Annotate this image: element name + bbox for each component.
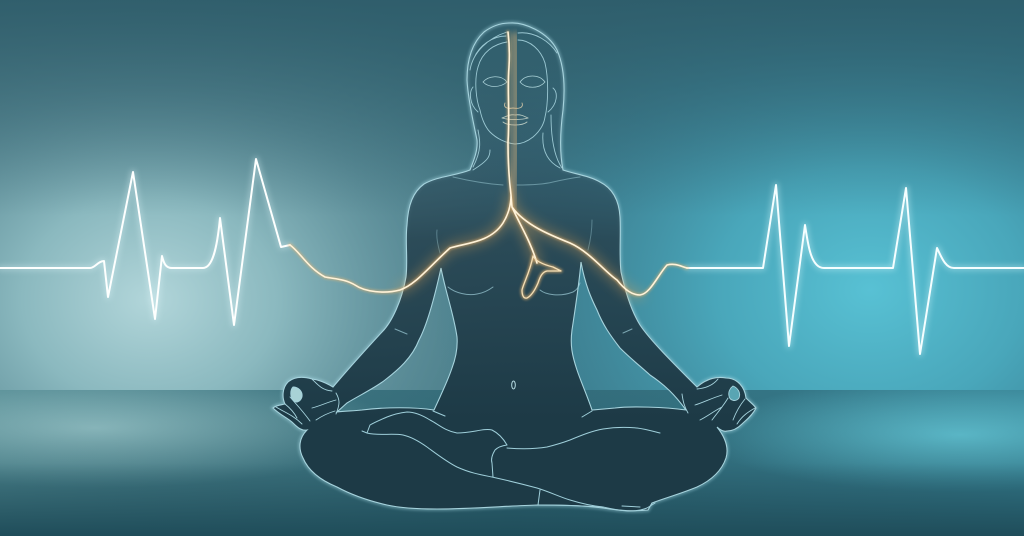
central glow column [512, 36, 516, 207]
left hand fingers [276, 379, 339, 424]
channel arms soft glow [290, 32, 687, 295]
chest curves [448, 283, 580, 295]
lips [502, 115, 528, 125]
icon: right hand mudra [682, 379, 755, 424]
nose [505, 103, 522, 108]
heart organ glow [522, 256, 561, 298]
right shin [507, 427, 660, 449]
hairline and hair strands [470, 32, 562, 170]
heartbeat line: left ECG [0, 159, 290, 325]
right ECG core [687, 185, 1024, 354]
left foot upper [367, 412, 507, 445]
heart organ core [522, 256, 561, 298]
figure outline glow [273, 23, 756, 511]
figure silhouette [273, 23, 756, 511]
floor [0, 390, 1024, 536]
torso and limb contour lines [362, 177, 660, 511]
heartbeat line: right ECG [687, 185, 1024, 354]
left ankle [492, 445, 507, 477]
waist creases [433, 411, 592, 417]
channel trunk and arms core [290, 32, 687, 295]
finger ring gap [729, 386, 740, 400]
face contour [476, 63, 548, 144]
background wall [0, 0, 1024, 392]
armpit lines [437, 220, 592, 253]
right hand fingers [682, 379, 755, 424]
finger ring gap [291, 387, 302, 402]
icon: left hand mudra [276, 379, 339, 424]
meditating figure [273, 23, 756, 511]
head and face [470, 32, 562, 170]
eyes [483, 76, 545, 87]
right ECG cool glow [687, 185, 1024, 354]
navel [512, 381, 515, 389]
lower foot [538, 490, 655, 511]
left foot sole and shin [362, 431, 603, 507]
left ECG cool glow [0, 159, 290, 325]
collar [453, 177, 580, 185]
left ECG core [0, 159, 290, 325]
elbow creases [395, 329, 632, 334]
golden energy channel [290, 32, 687, 298]
wide warm glow [400, 195, 640, 295]
ears [470, 87, 556, 112]
